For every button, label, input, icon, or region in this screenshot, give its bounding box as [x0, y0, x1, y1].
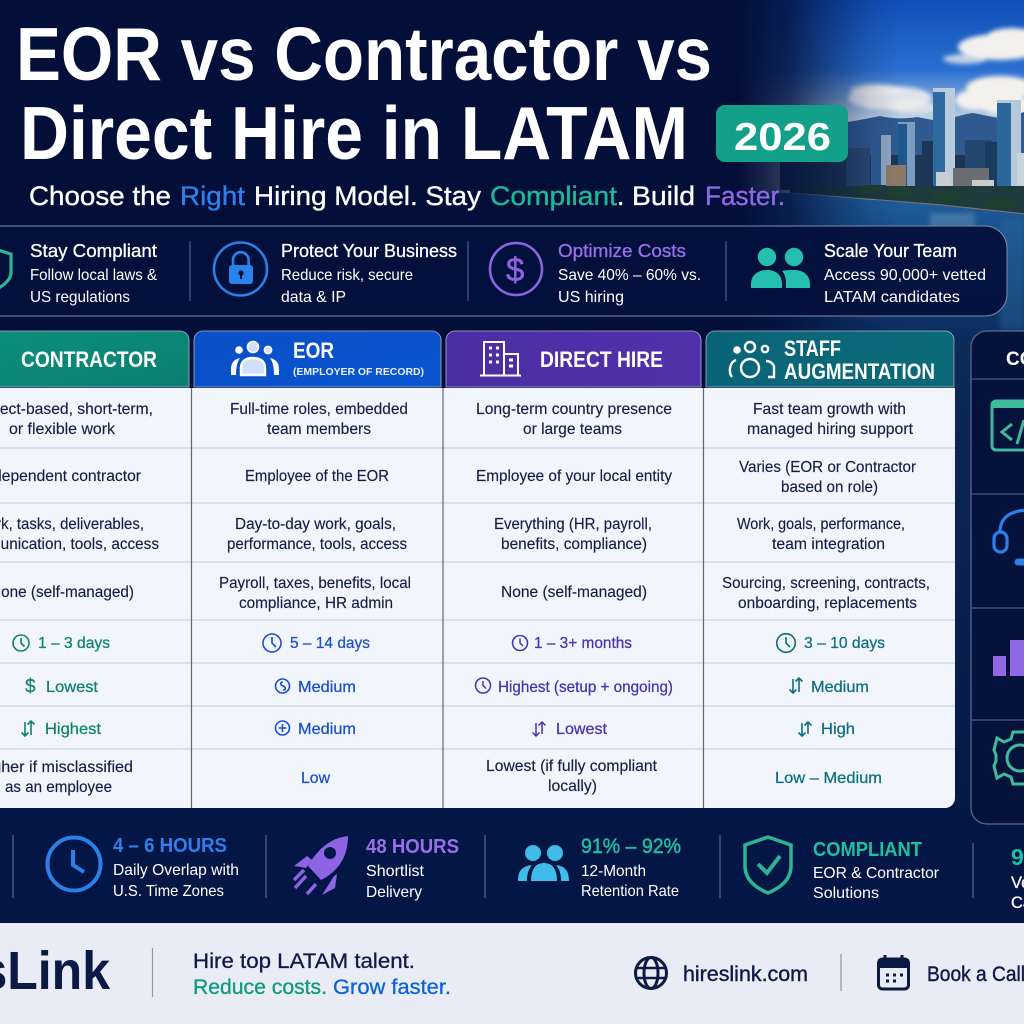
benefit: stay compliant	[0, 240, 157, 306]
icon: gear	[994, 732, 1024, 784]
stat: retention rate	[518, 834, 681, 900]
column: staff augmentation cells: team integration	[772, 536, 885, 553]
footer	[0, 923, 1024, 1024]
EOR metrics: Medium	[298, 721, 356, 738]
contractor metrics: Highest	[45, 721, 102, 738]
title: EOR vs Contractor vs	[16, 13, 712, 97]
direct hire metrics: Highest (setup + ongoing)	[498, 679, 673, 696]
EOR metrics: 5 – 14 days	[290, 635, 370, 652]
benefit: protect your business: Reduce risk, secure	[281, 267, 413, 284]
panel: common roles	[971, 331, 1024, 824]
column: contractor cells: as an employee	[5, 779, 112, 796]
column: staff augmentation cells	[722, 401, 930, 612]
column header: direct hire: DIRECT HIRE	[540, 348, 663, 372]
column: direct hire cells	[476, 401, 672, 795]
stat: shortlist delivery: 48 HOURS	[366, 835, 459, 858]
benefit: scale your team: Scale Your Team	[824, 240, 957, 261]
subtitle: Compliant	[490, 181, 618, 211]
column header: EOR: (EMPLOYER OF RECORD)	[293, 366, 424, 378]
panel: benefits strip	[0, 226, 1007, 316]
column: EOR cells: team members	[267, 421, 371, 438]
column: EOR cells	[219, 401, 411, 612]
column: staff augmentation cells: based on role)	[781, 479, 878, 496]
benefit: scale your team	[751, 240, 986, 306]
stat: shortlist delivery	[294, 835, 459, 901]
column: EOR cells: performance, tools, access	[227, 536, 407, 553]
benefit: optimize costs: $	[506, 251, 524, 288]
column: EOR cells: Day-to-day work, goals,	[235, 516, 396, 533]
stat: vetted candidates	[1011, 844, 1024, 912]
column: EOR cells: Employee of the EOR	[245, 468, 389, 485]
stat: overlap hours: U.S. Time Zones	[113, 883, 224, 900]
subtitle: Faster.	[705, 181, 785, 211]
stat: shortlist delivery: Shortlist	[366, 863, 425, 880]
stat: compliant	[745, 837, 940, 902]
column header: staff augmentation: AUGMENTATION	[784, 361, 935, 384]
year badge	[716, 105, 848, 162]
column: direct hire cells: None (self-managed)	[501, 584, 647, 601]
website	[636, 958, 808, 988]
subtitle: Choose the	[29, 181, 171, 211]
tagline: Grow faster.	[333, 976, 451, 999]
year badge: 2026	[734, 116, 831, 159]
stat: compliant: EOR & Contractor	[813, 865, 940, 882]
column header: EOR	[194, 331, 441, 387]
direct hire metrics	[476, 635, 673, 738]
column: direct hire cells: Long-term country presence	[476, 401, 672, 418]
column: EOR cells: compliance, HR admin	[239, 595, 393, 612]
icon: office building	[480, 342, 521, 376]
column header: EOR: EOR	[293, 339, 334, 363]
stat: compliant: COMPLIANT	[813, 839, 922, 861]
staff augmentation metrics	[775, 634, 885, 787]
hero photo: city skyline	[720, 0, 1024, 340]
column: direct hire cells: or large teams	[523, 421, 622, 438]
stats band	[0, 340, 1024, 922]
EOR metrics: Medium	[298, 679, 356, 696]
panel: comparison table	[0, 331, 955, 808]
benefit: stay compliant: Stay Compliant	[30, 240, 157, 261]
subtitle	[29, 181, 785, 211]
column: direct hire cells: Everything (HR, payroll,	[494, 516, 652, 533]
column: direct hire cells: locally)	[548, 778, 597, 795]
EOR metrics: Low	[301, 770, 330, 787]
direct hire metrics: Lowest	[556, 721, 608, 738]
stat: retention rate: 91% – 92%	[581, 834, 681, 858]
stat: overlap hours	[48, 834, 239, 900]
contractor metrics: Lowest	[46, 679, 99, 696]
tagline: Hire top LATAM talent.	[193, 950, 415, 973]
staff augmentation metrics: 3 – 10 days	[804, 635, 885, 652]
column header: staff augmentation	[706, 331, 954, 387]
benefit: optimize costs: US hiring	[558, 289, 624, 306]
benefit: optimize costs: Save 40% – 60% vs.	[558, 267, 701, 284]
icon: team	[730, 342, 774, 377]
benefit: stay compliant: Follow local laws &	[30, 267, 157, 284]
stat: overlap hours: 4 – 6 HOURS	[113, 834, 227, 857]
title: Direct Hire in LATAM	[20, 92, 688, 176]
column: direct hire cells: Lowest (if fully compliant	[486, 758, 658, 775]
stat: retention rate: 12-Month	[581, 863, 646, 880]
column: direct hire cells: Employee of your local entity	[476, 468, 672, 485]
column header: contractor: CONTRACTOR	[21, 348, 157, 372]
icon: code window	[992, 401, 1024, 450]
benefit: stay compliant: US regulations	[30, 289, 130, 306]
tagline: Reduce costs.	[193, 976, 327, 999]
column: staff augmentation cells: Sourcing, screening, contracts,	[722, 575, 930, 592]
direct hire metrics: 1 – 3+ months	[534, 635, 632, 652]
column: staff augmentation cells: managed hiring support	[747, 421, 914, 438]
column: EOR cells: Full-time roles, embedded	[230, 401, 408, 418]
subtitle: Hiring Model. Stay	[254, 181, 482, 211]
column: staff augmentation cells: Varies (EOR or Contractor	[739, 459, 917, 476]
column header: contractor	[0, 331, 189, 387]
column: staff augmentation cells: Work, goals, performance,	[737, 516, 905, 533]
benefit: protect your business	[214, 240, 457, 306]
staff augmentation metrics: Medium	[811, 679, 869, 696]
contractor metrics	[13, 635, 110, 738]
contractor metrics: 1 – 3 days	[38, 635, 110, 652]
staff augmentation metrics: Low – Medium	[775, 770, 882, 787]
stat: compliant: Solutions	[813, 885, 879, 902]
benefit: scale your team: Access 90,000+ vetted	[824, 267, 986, 284]
stat: shortlist delivery: Delivery	[366, 884, 422, 901]
column: contractor cells	[0, 401, 159, 796]
contractor metrics: $	[25, 676, 36, 698]
icon: people group	[231, 342, 279, 375]
staff augmentation metrics: High	[821, 721, 855, 738]
benefit: protect your business: data & IP	[281, 289, 346, 306]
stat: overlap hours: Daily Overlap with	[113, 862, 239, 879]
benefit: protect your business: Protect Your Business	[281, 240, 457, 261]
subtitle: Build	[632, 181, 695, 211]
icon: bar chart	[993, 640, 1024, 676]
stat: retention rate: Retention Rate	[581, 883, 679, 900]
column header: staff augmentation: STAFF	[784, 338, 841, 361]
column: direct hire cells: benefits, compliance)	[501, 536, 647, 553]
benefit: scale your team: LATAM candidates	[824, 289, 960, 306]
column: contractor cells: or flexible work	[9, 421, 116, 438]
tagline	[193, 950, 451, 999]
column: staff augmentation cells: Fast team growth with	[753, 401, 906, 418]
subtitle: .	[617, 181, 624, 211]
EOR metrics	[263, 634, 370, 787]
website: hireslink.com	[683, 963, 808, 986]
column: EOR cells: Payroll, taxes, benefits, local	[219, 575, 411, 592]
column: staff augmentation cells: onboarding, replacements	[738, 595, 917, 612]
subtitle: Right	[180, 181, 246, 211]
book a call	[878, 955, 1024, 989]
benefit: optimize costs	[490, 240, 701, 306]
title	[16, 13, 712, 176]
benefit: optimize costs: Optimize Costs	[558, 240, 686, 261]
icon: headset	[994, 510, 1024, 562]
column header: direct hire	[446, 331, 701, 387]
